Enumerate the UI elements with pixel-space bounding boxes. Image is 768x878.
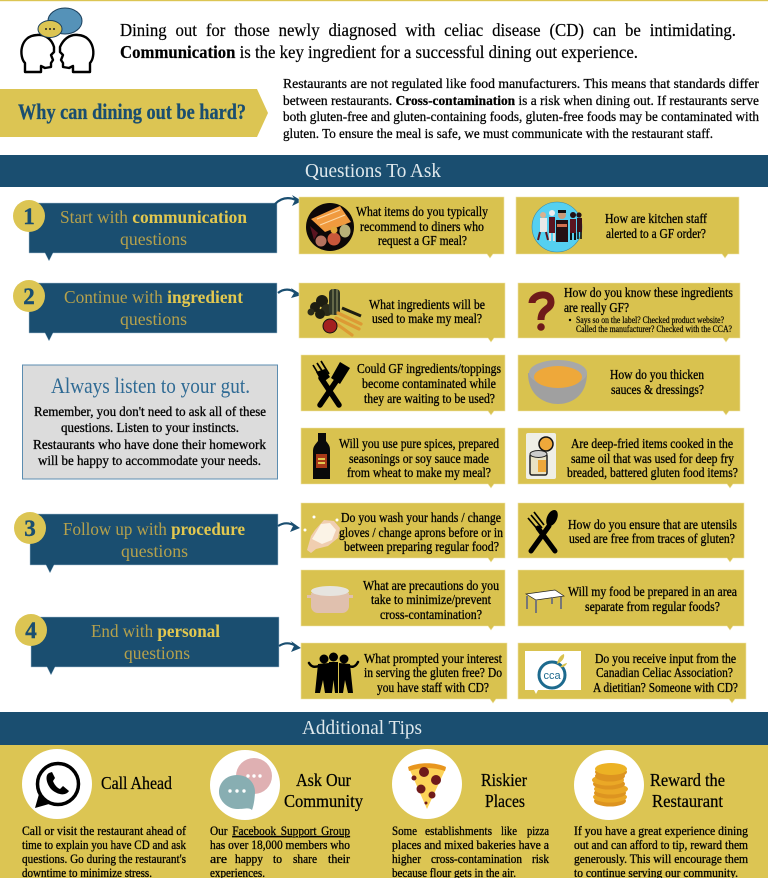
icon: soy sauce bottle xyxy=(313,433,330,479)
step 4 banner xyxy=(15,614,279,675)
tip: riskier places: higher xyxy=(392,852,422,866)
icon: phone chat bubble xyxy=(35,764,78,808)
card: celiac association input: Canadian Celiac Association? xyxy=(596,665,733,680)
tip: reward the restaurant: If you have a great experience dining xyxy=(574,824,749,838)
card: celiac association input xyxy=(518,643,746,703)
card: toppings contamination: they are waiting to be used? xyxy=(364,391,495,406)
intro text: Communication is the key ingredient for a successful dining out experience. xyxy=(120,42,638,62)
icon: chat bubbles xyxy=(219,758,272,810)
callout: always listen to your gut: Restaurants who have done their homework xyxy=(33,437,266,452)
icon: bowl of sauce xyxy=(528,360,587,404)
tip: riskier places: places and mixed bakeries have a xyxy=(392,838,549,852)
card: ingredients used: What ingredients will be xyxy=(369,297,485,312)
card: thicken sauces: How do you thicken xyxy=(610,367,704,382)
step 3 banner xyxy=(14,512,278,573)
icon: question mark xyxy=(532,295,551,331)
card: deep-fried items: breaded, battered gluten food items? xyxy=(567,465,738,480)
card: toppings contamination xyxy=(301,355,505,415)
callout: always listen to your gut: Remember, you don't need to ask all of these xyxy=(34,404,266,419)
step 4 banner: 4 xyxy=(25,618,37,643)
panel: tips background xyxy=(0,745,768,878)
tip: call ahead: questions. Go during the restaurant's xyxy=(22,852,186,866)
tip: ask our community: happy xyxy=(235,852,264,866)
card: kitchen staff alerts: alerted to a GF order? xyxy=(606,226,706,241)
card: utensils xyxy=(518,503,744,562)
tip: ask our community: Community xyxy=(284,791,363,811)
card: washing hands xyxy=(301,503,505,562)
tip: riskier places: Riskier xyxy=(481,770,527,790)
paragraph: why it is hard: Restaurants are not regulated like food manufacturers. This means that standards differ xyxy=(283,76,760,91)
card: how do you know xyxy=(518,283,740,342)
step 2 banner: 2 xyxy=(23,284,35,309)
step 4 banner: questions xyxy=(124,643,190,663)
callout: always listen to your gut: Always listen to your gut. xyxy=(51,373,250,398)
tip: ask our community: has over 18,000 members who xyxy=(210,838,350,852)
tip: reward the restaurant: out and can afford to tip, reward them xyxy=(574,838,748,852)
step 1 banner: 1 xyxy=(23,204,35,229)
heading bar: additional tips xyxy=(0,712,768,745)
card: washing hands: between preparing regular food? xyxy=(344,539,499,554)
paragraph: why it is hard: between restaurants. Cross-contamination is a risk when dining out. If restaurants serve xyxy=(283,93,759,108)
callout: always listen to your gut: will be happy to accommodate your needs. xyxy=(38,453,261,468)
intro text: Dining out for those newly diagnosed with celiac disease (CD) can be intimidating. xyxy=(120,20,736,41)
step 4 banner: End with personal xyxy=(91,621,220,641)
card: spices and soy sauce: seasonings or soy sauce made xyxy=(349,451,489,466)
tip: call ahead xyxy=(22,749,187,878)
card: washing hands: Do you wash your hands / change xyxy=(341,510,501,525)
icon: washing hands xyxy=(304,516,340,553)
card: spices and soy sauce xyxy=(301,428,505,488)
arrow 1 xyxy=(275,195,302,206)
tip: riskier places: like xyxy=(501,824,517,838)
card: deep-fried items: same oil that was used for deep fry xyxy=(571,451,734,466)
card: how do you know: Called the manufacturer? Checked with the CCA? xyxy=(576,324,732,334)
card: toppings contamination: Could GF ingredients/toppings xyxy=(357,361,501,376)
card: spices and soy sauce: from wheat to make my meal? xyxy=(347,465,491,480)
card: ingredients used: used to make my meal? xyxy=(372,311,482,326)
paragraph: why it is hard: both gluten-free and gluten-containing foods, gluten-free foods may be contaminated with xyxy=(283,109,759,124)
step 2 banner: Continue with ingredient xyxy=(64,287,243,307)
card: thicken sauces: sauces & dressings? xyxy=(611,382,704,397)
step 3 banner: Follow up with procedure xyxy=(63,519,245,539)
tip: riskier places: cross-contamination xyxy=(431,852,523,866)
tip: reward the restaurant: generously. This will encourage them xyxy=(574,852,748,866)
paragraph: why it is hard xyxy=(283,76,760,141)
icon: open oil can xyxy=(526,433,556,479)
icon: CCA logo xyxy=(525,651,581,694)
card: deep-fried items xyxy=(518,428,744,488)
card: how do you know: Says so on the label? Checked product website? xyxy=(576,315,724,325)
tip: riskier places xyxy=(392,749,550,878)
tip: ask our community: Ask Our xyxy=(296,770,351,790)
tip: ask our community: share xyxy=(293,852,317,866)
card: deep-fried items: Are deep-fried items cooked in the xyxy=(571,436,733,451)
step 2 banner xyxy=(13,280,277,341)
icon: plate of food xyxy=(306,203,354,251)
banner: why can dining out be hard xyxy=(0,89,268,137)
icon: group of people xyxy=(309,652,358,693)
tip: ask our community: are xyxy=(210,852,227,866)
card: celiac association input: Do you receive input from the xyxy=(595,651,736,666)
card: separate area: separate from regular foods? xyxy=(585,599,720,614)
card: toppings contamination: become contaminated while xyxy=(362,376,496,391)
tip: riskier places: establishments xyxy=(425,824,492,838)
card: precautions: cross-contamination? xyxy=(380,607,482,622)
arrow 4 xyxy=(279,641,301,652)
card: separate area xyxy=(518,570,744,630)
paragraph: why it is hard: gluten. To ensure the meal is safe, we must communicate with the restaurant staff. xyxy=(283,126,713,141)
card: kitchen staff alerts xyxy=(516,197,739,258)
step 3 banner: questions xyxy=(121,541,188,561)
card: personal interest: in serving the gluten free? Do xyxy=(364,665,502,680)
step 3 banner: 3 xyxy=(24,516,36,541)
card: how do you know: How do you know these ingredients xyxy=(564,285,733,300)
card: recommended items: recommend to diners who xyxy=(360,219,484,234)
step 1 banner: questions xyxy=(120,229,187,249)
heading bar: additional tips: Additional Tips xyxy=(302,717,422,739)
card: precautions: What are precautions do you xyxy=(363,578,499,593)
tip: reward the restaurant: Reward the xyxy=(650,770,725,790)
callout: always listen to your gut xyxy=(22,365,278,479)
card: recommended items: What items do you typically xyxy=(356,204,488,219)
card: utensils: used are free from traces of gluten? xyxy=(569,531,735,546)
tip: ask our community: Our Facebook Support Group xyxy=(210,824,350,838)
card: personal interest xyxy=(301,643,507,703)
tip: reward the restaurant xyxy=(574,750,749,878)
tip: riskier places: pizza xyxy=(527,824,549,838)
arrow 3 xyxy=(278,521,300,532)
card: precautions xyxy=(301,570,505,630)
step 1 banner: Start with communication xyxy=(60,207,247,227)
icon: two heads talking xyxy=(21,8,93,72)
card: thicken sauces xyxy=(518,355,740,415)
tip: riskier places: Places xyxy=(485,791,525,811)
callout: always listen to your gut: questions. Listen to your instincts. xyxy=(61,420,239,435)
icon: fork and spoon xyxy=(528,508,560,551)
icon: table xyxy=(526,590,564,613)
intro text xyxy=(120,20,736,62)
tip: call ahead: time to explain you have CD and ask xyxy=(22,838,187,852)
icon: kitchen staff xyxy=(532,202,582,252)
card: personal interest: What prompted your interest xyxy=(364,651,502,666)
card: separate area: Will my food be prepared in an area xyxy=(568,584,737,599)
tip: ask our community: their xyxy=(328,852,351,866)
card: recommended items xyxy=(299,197,504,258)
card: personal interest: you have staff with CD? xyxy=(377,680,489,695)
icon: cooking pot xyxy=(307,586,353,613)
icon: coin stack xyxy=(592,763,628,806)
tip: ask our community: to xyxy=(273,852,282,866)
step 2 banner: questions xyxy=(120,309,187,329)
card: utensils: How do you ensure that are utensils xyxy=(568,517,737,532)
tip: riskier places: Some xyxy=(392,824,417,838)
card: kitchen staff alerts: How are kitchen staff xyxy=(605,211,707,226)
heading bar: questions to ask: Questions To Ask xyxy=(305,160,441,182)
step 1 banner xyxy=(13,200,277,261)
card: washing hands: gloves / change aprons before or in xyxy=(339,525,503,540)
card: recommended items: request a GF meal? xyxy=(378,233,467,248)
card: spices and soy sauce: Will you use pure spices, prepared xyxy=(339,436,499,451)
card: ingredients used xyxy=(299,283,505,342)
icon: CCA logo: cca xyxy=(543,670,561,682)
heading bar: questions to ask xyxy=(0,155,768,187)
card: how do you know: are really GF? xyxy=(564,300,629,315)
tip: reward the restaurant: Restaurant xyxy=(652,791,723,811)
banner: why can dining out be hard: Why can dining out be hard? xyxy=(18,99,246,124)
tip: ask our community xyxy=(210,750,363,878)
icon: pizza slice xyxy=(408,763,446,809)
icon: vegetables xyxy=(308,289,361,335)
arrow 2 xyxy=(278,288,302,298)
card: precautions: take to minimize/prevent xyxy=(371,592,491,607)
tip: call ahead: Call or visit the restaurant ahead of xyxy=(22,824,187,838)
tip: call ahead: Call Ahead xyxy=(101,773,172,793)
icon: fork and spatula xyxy=(313,361,350,405)
tip: riskier places: risk xyxy=(532,852,550,866)
card: celiac association input: A dietitian? Someone with CD? xyxy=(593,680,738,695)
